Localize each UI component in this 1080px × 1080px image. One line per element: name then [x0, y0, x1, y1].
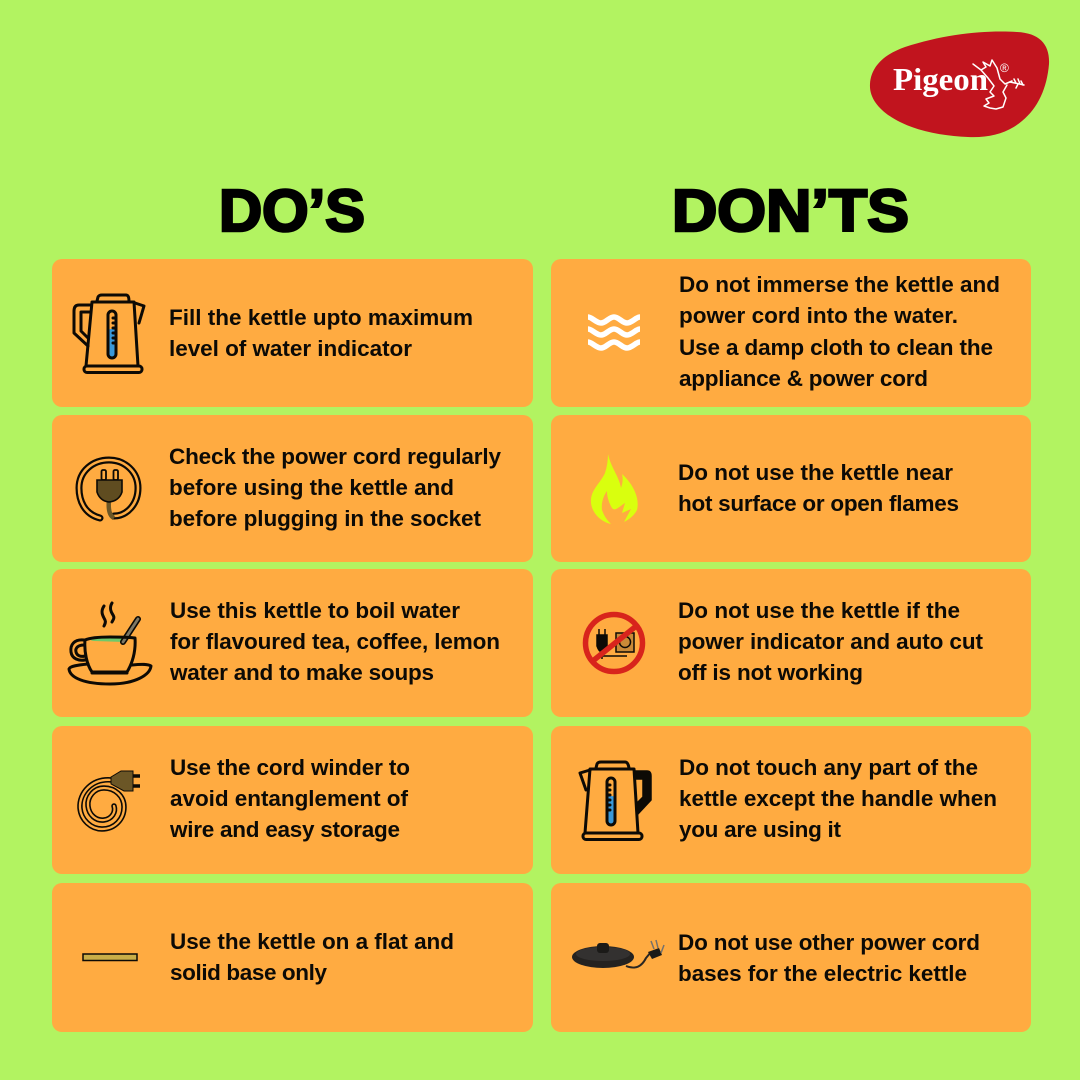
text: solid base only [170, 960, 327, 985]
text [679, 272, 1000, 391]
logo: Pigeon [870, 32, 1049, 137]
icon: water waves [588, 317, 640, 348]
text [678, 930, 980, 986]
text: you are using it [679, 817, 842, 842]
panel: power indicator not working [551, 569, 1031, 717]
text: power cord into the water. [679, 303, 958, 328]
text: Use the cord winder to [170, 755, 410, 780]
text: for flavoured tea, coffee, lemon [170, 629, 500, 654]
text: bases for the electric kettle [678, 961, 967, 986]
text: before using the kettle and [169, 475, 454, 500]
logo wordmark: Pigeon [893, 61, 988, 97]
logo dove [973, 60, 1024, 109]
text: Do not use the kettle if the [678, 598, 960, 623]
panel: do not use near flames [551, 415, 1031, 562]
text [678, 460, 959, 516]
text: avoid entanglement of [170, 786, 408, 811]
panel: do not touch [551, 726, 1031, 874]
text: Do not touch any part of the [679, 755, 978, 780]
icon: coiled cord with plug [80, 771, 140, 829]
text: water and to make soups [169, 660, 434, 685]
logo registered mark: ® [1000, 61, 1009, 75]
panel: cord winder [52, 726, 533, 874]
heading: DO'S: DO’S [219, 178, 365, 244]
panel: do not use other bases [551, 883, 1031, 1032]
text [679, 755, 997, 842]
icon: power base with cord [572, 940, 664, 968]
text: Fill the kettle upto maximum [169, 305, 473, 330]
icon: cup and saucer [69, 603, 151, 684]
text: Do not use other power cord [678, 930, 980, 955]
text [170, 929, 454, 985]
text [169, 755, 410, 842]
panel: fill the kettle [52, 259, 533, 407]
text: Use the kettle on a flat and [170, 929, 454, 954]
text: off is not working [678, 660, 863, 685]
panel: boil water [52, 569, 533, 717]
panel: do not immerse [551, 259, 1031, 407]
text: kettle except the handle when [679, 786, 997, 811]
text: power indicator and auto cut [678, 629, 984, 654]
panel: check the power cord [52, 415, 533, 562]
text: level of water indicator [169, 336, 412, 361]
text [169, 305, 473, 361]
icon: prohibited plug and socket [586, 614, 642, 672]
text [678, 598, 984, 685]
panel: flat base [52, 883, 533, 1032]
text: appliance & power cord [679, 366, 928, 391]
text: hot surface or open flames [678, 491, 959, 516]
text [169, 598, 500, 685]
text: wire and easy storage [169, 817, 400, 842]
logo red blob [870, 32, 1049, 137]
text [169, 444, 501, 531]
text: Do not immerse the kettle and [679, 272, 1000, 297]
text: Check the power cord regularly [169, 444, 501, 469]
text: before plugging in the socket [169, 506, 482, 531]
icon: plug in cord circle [79, 460, 138, 518]
icon: flat surface [83, 954, 137, 960]
icon: kettle with water indicator [74, 295, 144, 372]
text: Use a damp cloth to clean the [679, 335, 993, 360]
text: Use this kettle to boil water [170, 598, 460, 623]
icon: kettle with black handle [580, 762, 651, 840]
text: Do not use the kettle near [678, 460, 953, 485]
heading: DON'TS: DON’TS [672, 178, 909, 244]
icon: flame [591, 454, 638, 524]
